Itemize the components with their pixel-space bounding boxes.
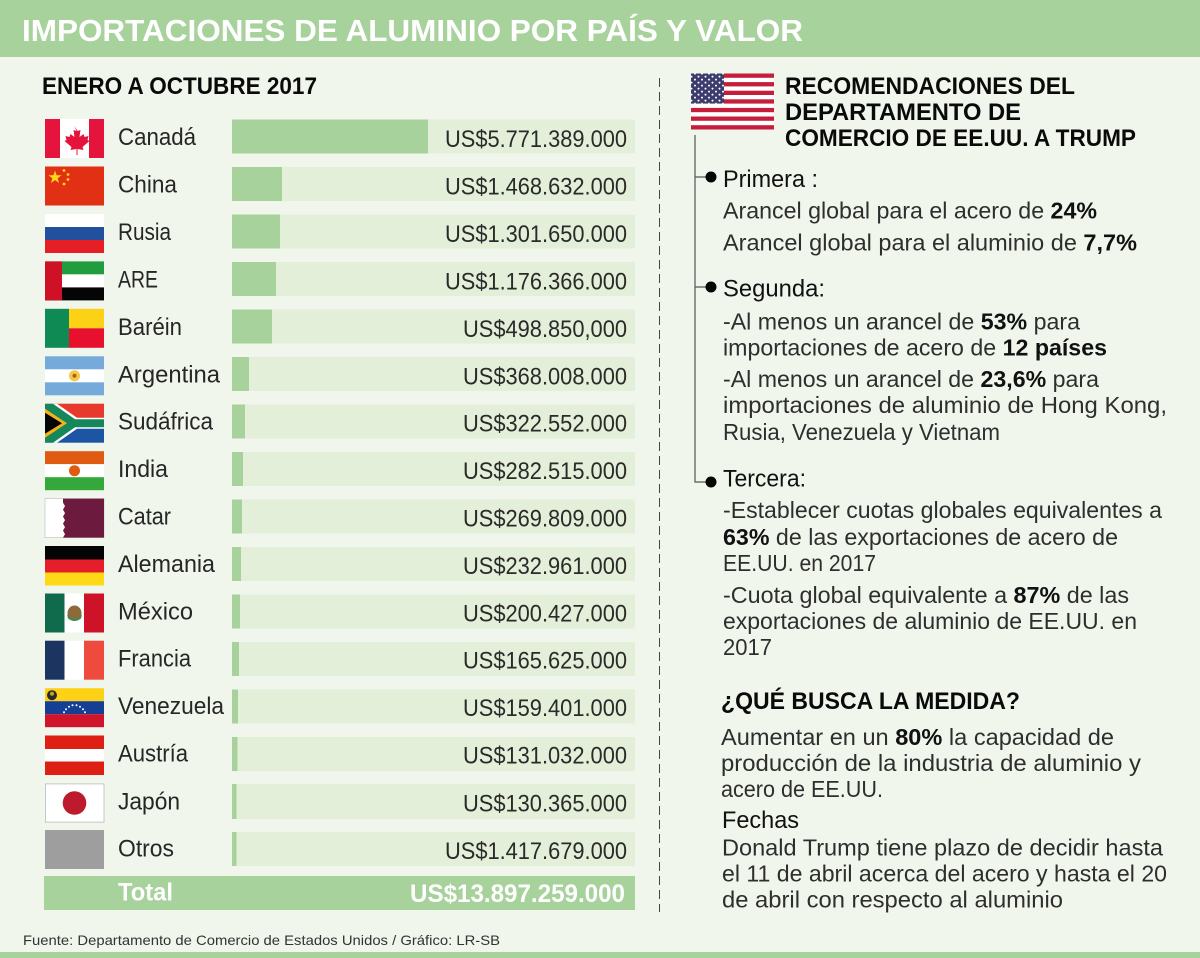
country name: Argentina: [118, 361, 221, 388]
panel heading: period: ENERO A OCTUBRE 2017: [42, 73, 317, 100]
block: Primera: Arancel global para el aluminio de 7,7%: [723, 230, 1137, 256]
bar: [232, 737, 238, 771]
row: Francia: [45, 641, 635, 680]
flag: Russia: [45, 214, 104, 253]
flag: Japan: [45, 784, 104, 822]
value: US$165.625.000: [463, 648, 627, 675]
row: Catar: [45, 499, 635, 538]
value: US$322.552.000: [463, 411, 627, 438]
bar: [232, 404, 245, 438]
total row: Total: [118, 878, 173, 906]
value: US$159.401.000: [463, 695, 627, 722]
total row: [44, 876, 635, 910]
block: Primera: Arancel global para el acero de 24%: [723, 198, 1097, 224]
bar: [232, 262, 276, 296]
country name: India: [118, 456, 169, 483]
flag: Niger-style: [45, 451, 104, 490]
bar: [232, 594, 240, 628]
block: Tercera: Tercera:: [723, 466, 806, 493]
row: Argentina: [45, 356, 635, 395]
panel: import bar chart by country: [44, 119, 635, 910]
bar: [232, 500, 242, 534]
flag: South Africa: [45, 404, 104, 443]
block: Segunda: importaciones de acero de 12 países: [723, 334, 1107, 360]
row: Otros: [45, 830, 635, 869]
country name: Japón: [118, 788, 180, 816]
row: Venezuela: [45, 688, 635, 727]
bar: [232, 784, 236, 819]
value: US$269.809.000: [463, 506, 627, 533]
text: dates: de abril con respecto al aluminio: [722, 887, 1063, 913]
heading: recommendations: [785, 73, 1136, 152]
text: dates: [722, 807, 1167, 913]
row: Baréin: [45, 309, 635, 348]
text: dates: Donald Trump tiene plazo de decidir hasta: [722, 835, 1163, 861]
value: US$1.176.366.000: [445, 268, 627, 295]
text: dates: Fechas: [722, 807, 799, 834]
value: US$1.417.679.000: [445, 838, 627, 865]
value: US$1.468.632.000: [445, 174, 627, 200]
row: Japón: [45, 784, 635, 822]
bar: [232, 120, 428, 154]
text: goal of the measure: Aumentar en un 80% la capacidad de: [721, 724, 1114, 750]
block: Tercera: 63% de las exportaciones de acero de: [723, 524, 1118, 550]
block: Primera: [723, 166, 1137, 256]
icon: US flag: [691, 74, 774, 130]
flag: China: [45, 166, 104, 206]
panel: recommendations: [691, 73, 1167, 913]
row: Austria: [45, 736, 635, 775]
block: Segunda: Segunda:: [723, 276, 825, 303]
text: dates: el 11 de abril acerca del acero y hasta el 20: [722, 861, 1167, 887]
country name: Austría: [118, 740, 189, 768]
row: Sudáfrica: [45, 404, 635, 443]
value: US$131.032.000: [463, 742, 627, 770]
flag: Germany: [45, 546, 104, 586]
bar: [232, 690, 238, 724]
row: ARE: [45, 261, 635, 300]
flag: United Arab Emirates: [45, 261, 104, 300]
text: goal of the measure: [721, 724, 1142, 802]
row: Alemania: [45, 546, 635, 586]
flag: Argentina: [45, 356, 104, 395]
bar: [232, 357, 249, 391]
flag: Benin-style: [45, 309, 104, 348]
country name: México: [118, 598, 193, 626]
block: Primera: Primera :: [723, 166, 818, 193]
flag: France: [45, 641, 104, 680]
value: US$282.515.000: [463, 458, 627, 485]
bar: [232, 832, 236, 866]
heading: recommendations: COMERCIO DE EE.UU. A TRUMP: [785, 125, 1136, 152]
flag: Qatar: [45, 499, 104, 538]
block: Tercera: [723, 466, 1162, 660]
value: US$368.008.000: [463, 363, 627, 390]
flag: Canada: [45, 119, 104, 158]
row: India: [45, 451, 635, 490]
row: México: [45, 594, 635, 632]
timeline connector: [695, 135, 716, 488]
source note: Fuente: Departamento de Comercio de Estados Unidos / Gráfico: LR-SB: [23, 932, 500, 948]
text: goal of the measure: producción de la industria de aluminio y: [721, 750, 1142, 776]
flag: Mexico: [45, 594, 104, 632]
value: US$200.427.000: [463, 600, 627, 628]
country name: Venezuela: [118, 693, 225, 720]
block: Segunda: Rusia, Venezuela y Vietnam: [723, 419, 1000, 445]
bar: [232, 547, 241, 581]
heading: recommendations: RECOMENDACIONES DEL: [785, 73, 1075, 100]
block: Tercera: EE.UU. en 2017: [723, 550, 876, 576]
bar: [232, 642, 239, 676]
flag: Austria: [45, 736, 104, 775]
row: Canadá: [45, 119, 635, 158]
block: Tercera: exportaciones de aluminio de EE.UU. en: [723, 608, 1137, 634]
heading: recommendations: DEPARTAMENTO DE: [785, 99, 1021, 126]
country name: Baréin: [118, 314, 182, 341]
total row: US$13.897.259.000: [410, 880, 625, 908]
value: US$498.850,000: [463, 316, 627, 343]
block: Segunda: importaciones de aluminio de Hong Kong,: [723, 392, 1167, 418]
bar: [232, 310, 272, 344]
country name: Francia: [118, 646, 192, 673]
value: US$130.365.000: [463, 790, 627, 818]
row: Rusia: [45, 214, 635, 253]
bar: [232, 214, 280, 248]
title banner: IMPORTACIONES DE ALUMINIO POR PAÍS Y VALOR: [22, 13, 803, 48]
country name: Otros: [118, 836, 174, 862]
bar: [232, 167, 282, 201]
country name: Rusia: [118, 219, 172, 246]
value: US$5.771.389.000: [445, 126, 627, 153]
block: Segunda: -Al menos un arancel de 53% para: [723, 308, 1080, 334]
text: goal of the measure: acero de EE.UU.: [721, 776, 883, 802]
heading: goal of the measure: ¿QUÉ BUSCA LA MEDIDA?: [721, 687, 1020, 715]
flag: Venezuela: [45, 688, 104, 727]
country name: ARE: [118, 266, 158, 293]
row: China: [45, 166, 635, 206]
country name: Alemania: [118, 551, 216, 578]
value: US$1.301.650.000: [445, 221, 627, 248]
country name: Canadá: [118, 124, 197, 151]
swatch: other countries: [45, 830, 104, 869]
block: Tercera: -Cuota global equivalente a 87% de las: [723, 582, 1129, 608]
bar: [232, 452, 243, 486]
title banner: [0, 0, 1200, 57]
country name: Sudáfrica: [118, 409, 214, 436]
block: Tercera: -Establecer cuotas globales equivalentes a: [723, 497, 1162, 523]
country name: Catar: [118, 504, 171, 531]
country name: China: [118, 172, 178, 198]
block: Tercera: 2017: [723, 634, 772, 660]
value: US$232.961.000: [463, 553, 627, 580]
block: Segunda: [723, 276, 1167, 445]
block: Segunda: -Al menos un arancel de 23,6% para: [723, 366, 1099, 392]
